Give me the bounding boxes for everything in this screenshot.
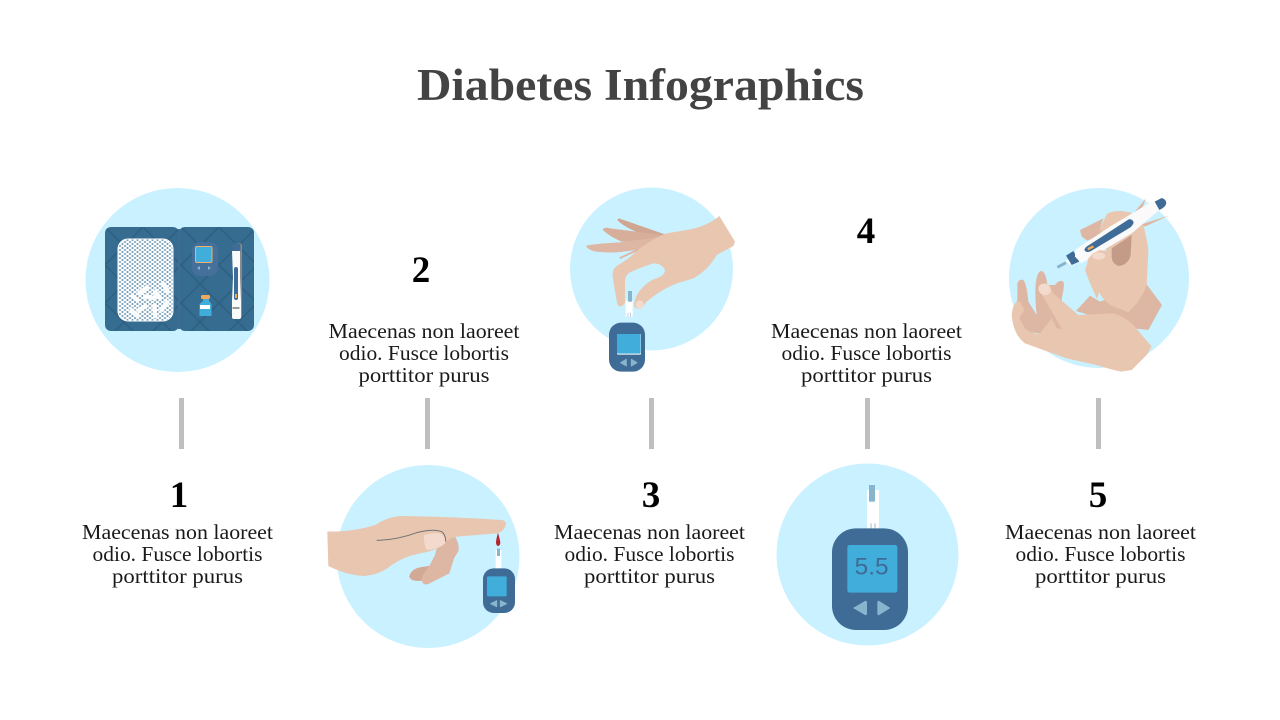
reading value: 5.5: [855, 554, 889, 581]
description 3: odio. Fusce lobortis: [564, 542, 734, 566]
icon: test strip: [867, 485, 879, 529]
number 5: 5: [1089, 475, 1107, 516]
step 5 text block: [1005, 475, 1196, 588]
icon: blood drop: [496, 533, 500, 546]
icon: test strip: [496, 549, 501, 569]
description 1: odio. Fusce lobortis: [92, 542, 262, 566]
icon: lancet pen: [1057, 198, 1166, 269]
number 4: 4: [857, 211, 875, 252]
step 1 text block: [82, 475, 273, 588]
circle background 3: [570, 188, 733, 350]
icon: lancet pen: [232, 243, 242, 319]
description 2: Maecenas non laoreet: [328, 319, 520, 343]
icon: reaching hand: [613, 216, 735, 309]
icon: back fingers: [1080, 218, 1112, 241]
description 4: Maecenas non laoreet: [771, 319, 962, 343]
icon: gripping hand: [1085, 211, 1148, 312]
number 3: 3: [642, 475, 660, 516]
meter screen: [847, 545, 897, 593]
circle background 1: [86, 188, 270, 372]
icon: pointing hand: [327, 516, 506, 576]
connector line 4: [865, 398, 870, 449]
panel: step 1 kit illustration: [86, 188, 270, 372]
icon: back fingers: [586, 218, 665, 259]
description 2: odio. Fusce lobortis: [339, 341, 509, 365]
circle background 5: [1009, 188, 1189, 368]
palm shadow: [1112, 235, 1132, 266]
description 3: porttitor purus: [584, 564, 715, 588]
panel: step 3 hand with strip illustration: [570, 188, 735, 372]
description 5: Maecenas non laoreet: [1005, 520, 1196, 544]
step 3 text block: [554, 475, 745, 588]
front thumbnail: [1036, 281, 1053, 297]
icon: thin pen shadows: [1133, 198, 1169, 227]
panel: step 5 lancet pen illustration: [1009, 188, 1189, 372]
thumb crease line: [377, 530, 446, 542]
title: Diabetes Infographics: [417, 60, 864, 110]
thumbnail on pen: [1092, 252, 1105, 260]
icon: folded fingers: [409, 536, 459, 585]
circle background 2: [336, 465, 520, 648]
icon: back hand wrist: [1076, 284, 1162, 330]
description 4: porttitor purus: [801, 363, 932, 387]
description 5: porttitor purus: [1035, 564, 1166, 588]
icon: fingernail: [636, 300, 644, 309]
description 5: odio. Fusce lobortis: [1016, 542, 1186, 566]
icon: thumbnail: [424, 533, 445, 550]
icon: net bag with strips: [118, 239, 173, 321]
icon: front hand fingers: [1013, 271, 1064, 333]
panel: step 2 finger prick illustration: [327, 465, 520, 648]
connector line 3: [649, 398, 654, 449]
icon: thumb on pen: [1087, 250, 1109, 262]
description 1: Maecenas non laoreet: [82, 520, 273, 544]
connector line 5: [1096, 398, 1101, 449]
description 4: odio. Fusce lobortis: [782, 341, 952, 365]
connector line 2: [425, 398, 430, 449]
description 3: Maecenas non laoreet: [554, 520, 745, 544]
icon: glucose meter: [609, 323, 645, 372]
icon: glucose meter: [483, 568, 515, 613]
icon: open kit case: [105, 227, 254, 331]
icon: vial: [200, 295, 212, 316]
step 2 text block: [328, 250, 520, 387]
meter arrow buttons: [853, 601, 890, 615]
icon: front hand: [1012, 283, 1152, 372]
number 2: 2: [412, 250, 430, 291]
panel: step 4 meter reading illustration: [776, 464, 958, 646]
description 1: porttitor purus: [112, 564, 243, 588]
step 4 text block: [771, 211, 962, 387]
description 2: porttitor purus: [358, 363, 490, 387]
circle background 4: [776, 464, 958, 646]
icon: glucose meter: [832, 528, 908, 630]
icon: small meter: [192, 242, 218, 276]
number 1: 1: [170, 475, 188, 516]
icon: test strip: [626, 291, 633, 317]
connector line 1: [179, 398, 184, 449]
